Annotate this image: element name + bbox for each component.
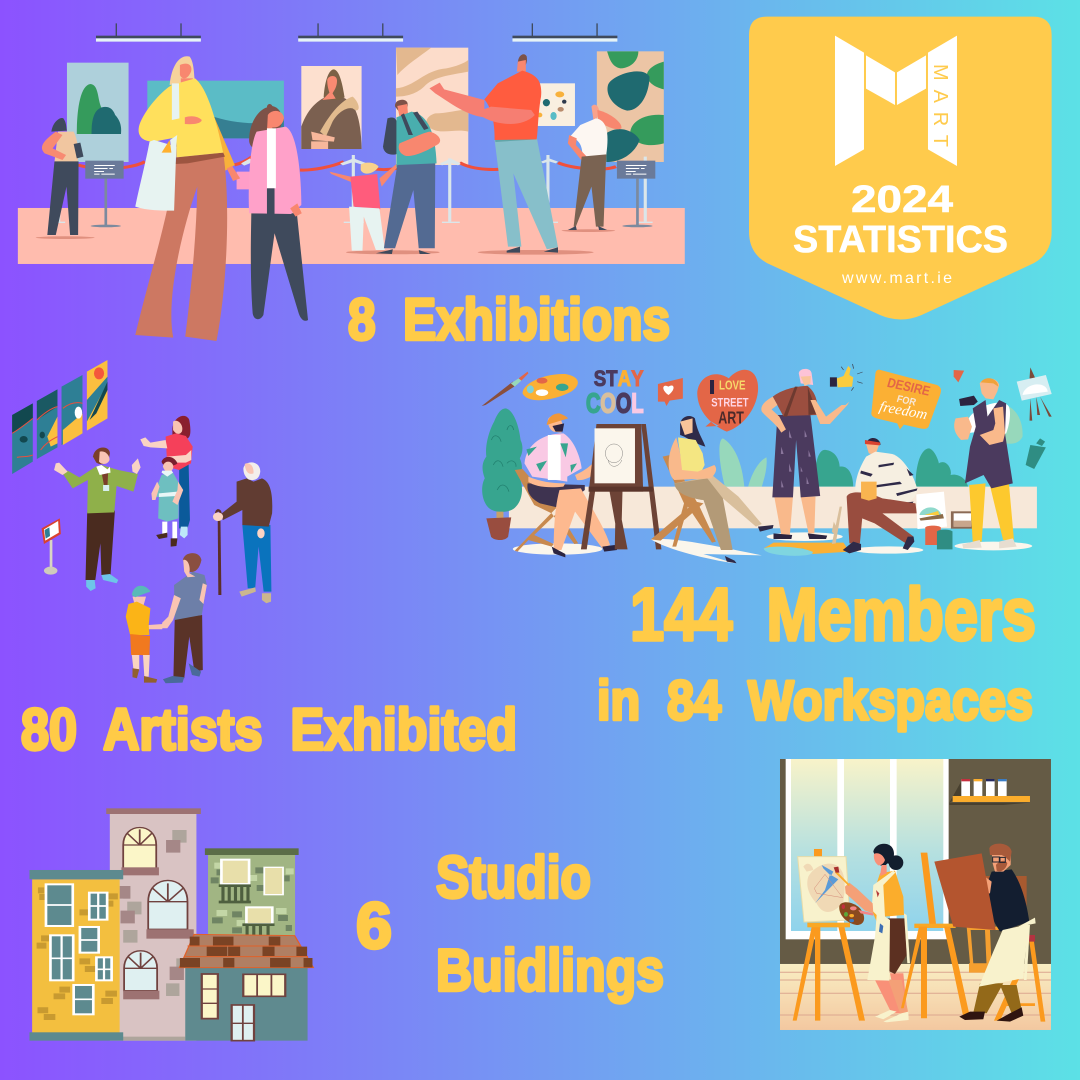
- small easel and spray can: [1017, 367, 1052, 469]
- website: www.mart.ie: [841, 270, 952, 287]
- potted tree: [482, 408, 522, 540]
- teal house with tiled roof: [179, 934, 313, 1041]
- speech heart: I love street art: I: [708, 376, 716, 399]
- speech heart: I love street art: STREET: [711, 396, 749, 409]
- speech bubble: desire for freedom: DESIRE: [885, 376, 932, 399]
- speech heart: I love street art: LOVE: [719, 378, 745, 392]
- badge shield: [749, 17, 1052, 319]
- illustration: street art community: [482, 364, 1052, 563]
- pink tower: [106, 808, 201, 1041]
- figure: seated woman: [651, 416, 773, 563]
- figure: man in striped sweater: [764, 438, 923, 556]
- left easel and canvas: [793, 849, 865, 1021]
- ceiling lights: [96, 23, 617, 42]
- figure: photographer: [954, 378, 1032, 550]
- velvet ropes and posts: [53, 155, 653, 223]
- logo wordmark: MART: [929, 64, 951, 147]
- woman painter: [834, 844, 910, 1022]
- mother in red shirt and daughter: [140, 416, 193, 547]
- four panel artwork: [12, 360, 107, 474]
- speech bubble: desire for freedom: [871, 370, 941, 429]
- illustration: two painters in a studio: [780, 759, 1051, 1030]
- icon: thumbs up: [830, 364, 863, 391]
- speech heart: I love street art: ART: [718, 408, 744, 427]
- figure: tall bearded man pointing: [429, 54, 594, 255]
- speech bubble: desire for freedom: freedom: [878, 399, 929, 423]
- heading: studio: Studio: [436, 844, 591, 910]
- speech heart: I love street art: [697, 370, 758, 432]
- figure: woman at left with folder: [36, 118, 95, 239]
- figure: girl in pink jacket: [227, 104, 308, 321]
- MART logo mark: [835, 36, 957, 166]
- figure: man in white shirt: [562, 105, 621, 232]
- heading: buildings: Buidlings: [436, 938, 664, 1004]
- father and son: [126, 553, 207, 683]
- speech bubble: desire for freedom: FOR: [895, 394, 917, 408]
- stickers: brush, palette, words: STAY: [594, 367, 644, 392]
- seated stool and back easel: [967, 876, 1045, 1022]
- figure: boy with backpack and teal shirt: [376, 100, 440, 254]
- guide in green sweater: [54, 447, 141, 591]
- backing wall: [509, 438, 1037, 528]
- figure: man drawing at easel: [513, 413, 617, 557]
- illustration: artists visiting gallery, isometric: [12, 360, 272, 683]
- room, window and floor: [780, 759, 1051, 1030]
- sign on a stand: [42, 518, 61, 575]
- badge title 2024: 2024: [851, 179, 953, 221]
- stickers: brush, palette, words: COOL: [586, 389, 644, 419]
- yellow building: [29, 870, 123, 1041]
- man artist: [959, 844, 1036, 1022]
- middle easel: [901, 853, 970, 1018]
- shelf with paint jars: [949, 779, 1030, 805]
- stickers: brush, palette, words: [482, 367, 964, 419]
- heading: 8 exhibitions: 8 Exhibitions: [348, 288, 670, 352]
- number: 6: 6: [356, 889, 392, 962]
- figure: standing woman with pink hair: [761, 369, 849, 541]
- illustration: gallery exhibition scene: [18, 23, 685, 341]
- illustration: colourful studio buildings: [29, 808, 313, 1041]
- figure: tall woman in yellow with tote bag: [135, 56, 235, 341]
- easel with drawing: [581, 424, 661, 549]
- art canvases and paint cans: [916, 492, 972, 549]
- paintings on the wall: [67, 48, 664, 165]
- logo badge: MART 2024 statistics: [749, 17, 1052, 319]
- elderly man with cane: [213, 462, 272, 603]
- badge title statistics: STATISTICS: [793, 219, 1008, 261]
- info signs: [85, 161, 655, 227]
- green building: [205, 848, 299, 937]
- brown canvas held by man: [934, 853, 996, 930]
- figure: small child with raised arms: [329, 163, 440, 254]
- heading: 80 artists exhibited: 80 Artists Exhibited: [21, 698, 517, 762]
